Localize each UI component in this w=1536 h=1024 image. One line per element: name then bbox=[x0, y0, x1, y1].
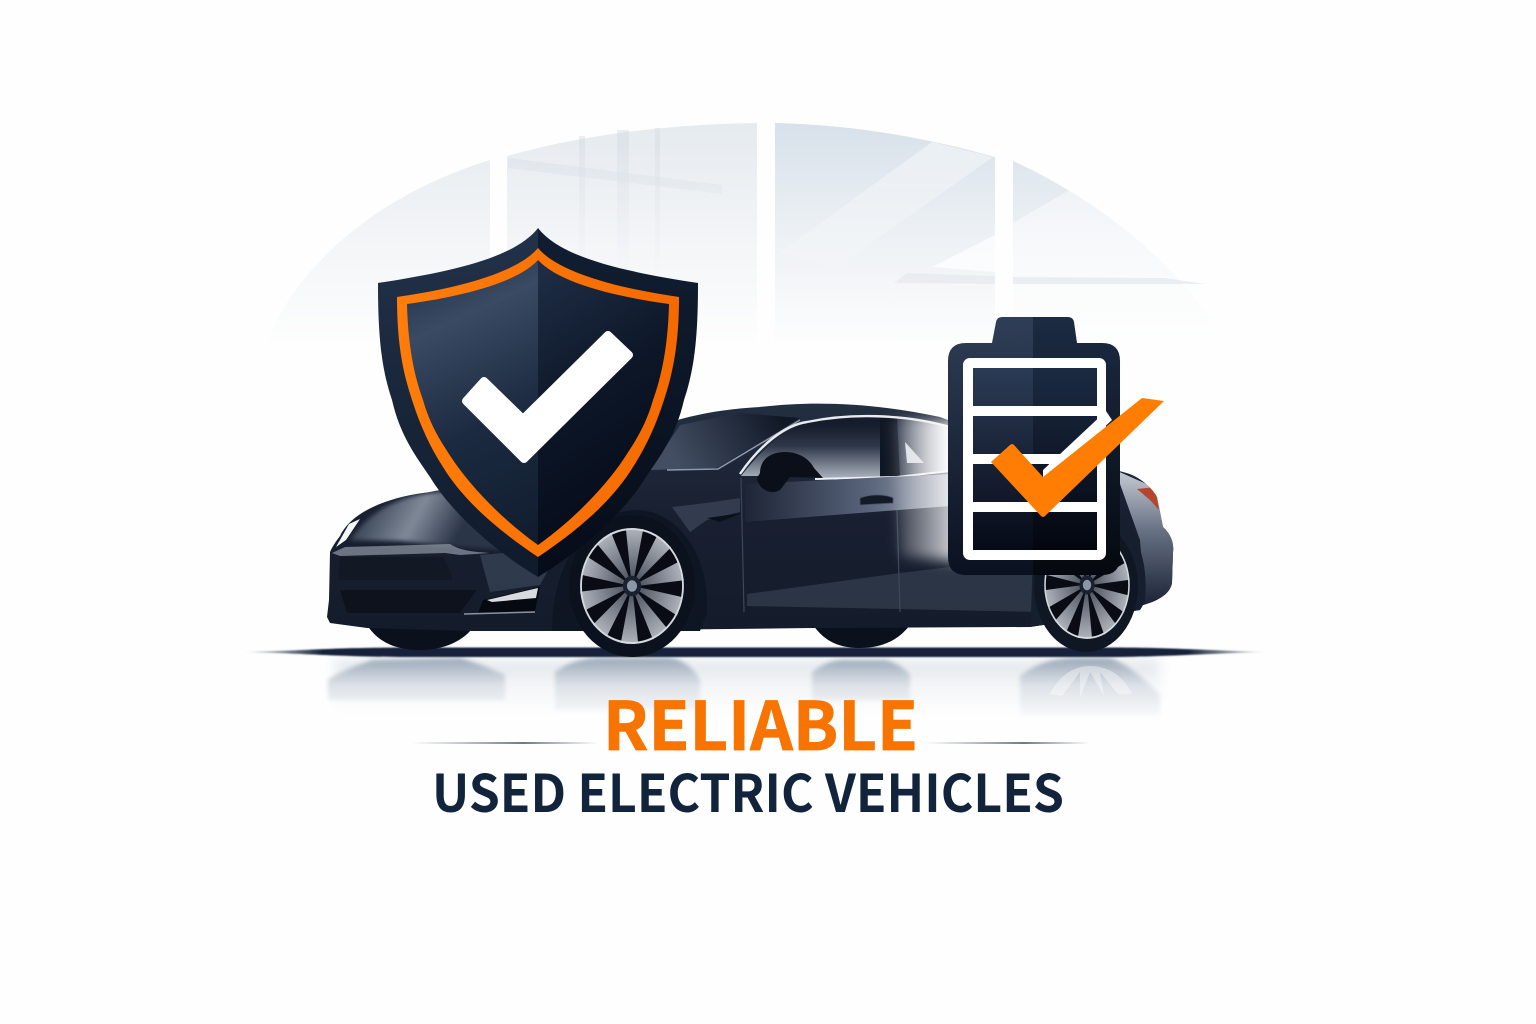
battery terminal bbox=[992, 317, 1033, 343]
shield check mark bbox=[466, 335, 629, 459]
tail light bbox=[1137, 487, 1159, 510]
shoulder sheen bbox=[745, 474, 950, 522]
door lines bbox=[741, 478, 900, 612]
lower grille bbox=[340, 590, 477, 613]
lower sheen bbox=[747, 567, 1040, 612]
battery icon bbox=[948, 317, 1164, 575]
hood highlight bbox=[350, 490, 498, 550]
battery casing bbox=[948, 343, 1033, 575]
title: reliable: RELIABLE bbox=[603, 673, 918, 770]
door handle bbox=[860, 495, 893, 505]
windshield bbox=[650, 413, 800, 470]
subtitle: USED ELECTRIC VEHICLES bbox=[432, 752, 1064, 827]
rear wheel bbox=[1034, 520, 1138, 652]
headlight bbox=[336, 519, 360, 547]
battery cells bbox=[973, 368, 1097, 550]
battery inner frame bbox=[963, 358, 1106, 560]
background: window dome bbox=[314, 123, 1204, 296]
shield icon bbox=[378, 228, 698, 577]
illustration: reliable used electric vehicles bbox=[252, 123, 1259, 812]
rear wheel arch bbox=[1030, 553, 1146, 627]
car bbox=[327, 404, 1175, 657]
front air intake bbox=[478, 587, 540, 613]
bumper sheen bbox=[480, 553, 548, 592]
battery check mark bbox=[991, 398, 1164, 517]
body details bbox=[332, 413, 1175, 640]
divider lines bbox=[412, 742, 1090, 744]
far wheels bbox=[367, 625, 910, 650]
ground shadow bbox=[240, 648, 1270, 657]
side glass bbox=[741, 416, 880, 478]
side mirror bbox=[757, 452, 823, 492]
upper grille bbox=[338, 557, 452, 580]
floor reflection bbox=[328, 658, 1160, 720]
shield inner bbox=[407, 260, 538, 545]
window chrome bbox=[740, 416, 950, 474]
car body bbox=[327, 404, 1173, 631]
fade near battery bbox=[890, 418, 962, 562]
shield orange border bbox=[397, 248, 679, 557]
rear quarter bbox=[1120, 472, 1174, 604]
shield outer bbox=[378, 228, 538, 577]
front wheel bbox=[552, 510, 707, 657]
